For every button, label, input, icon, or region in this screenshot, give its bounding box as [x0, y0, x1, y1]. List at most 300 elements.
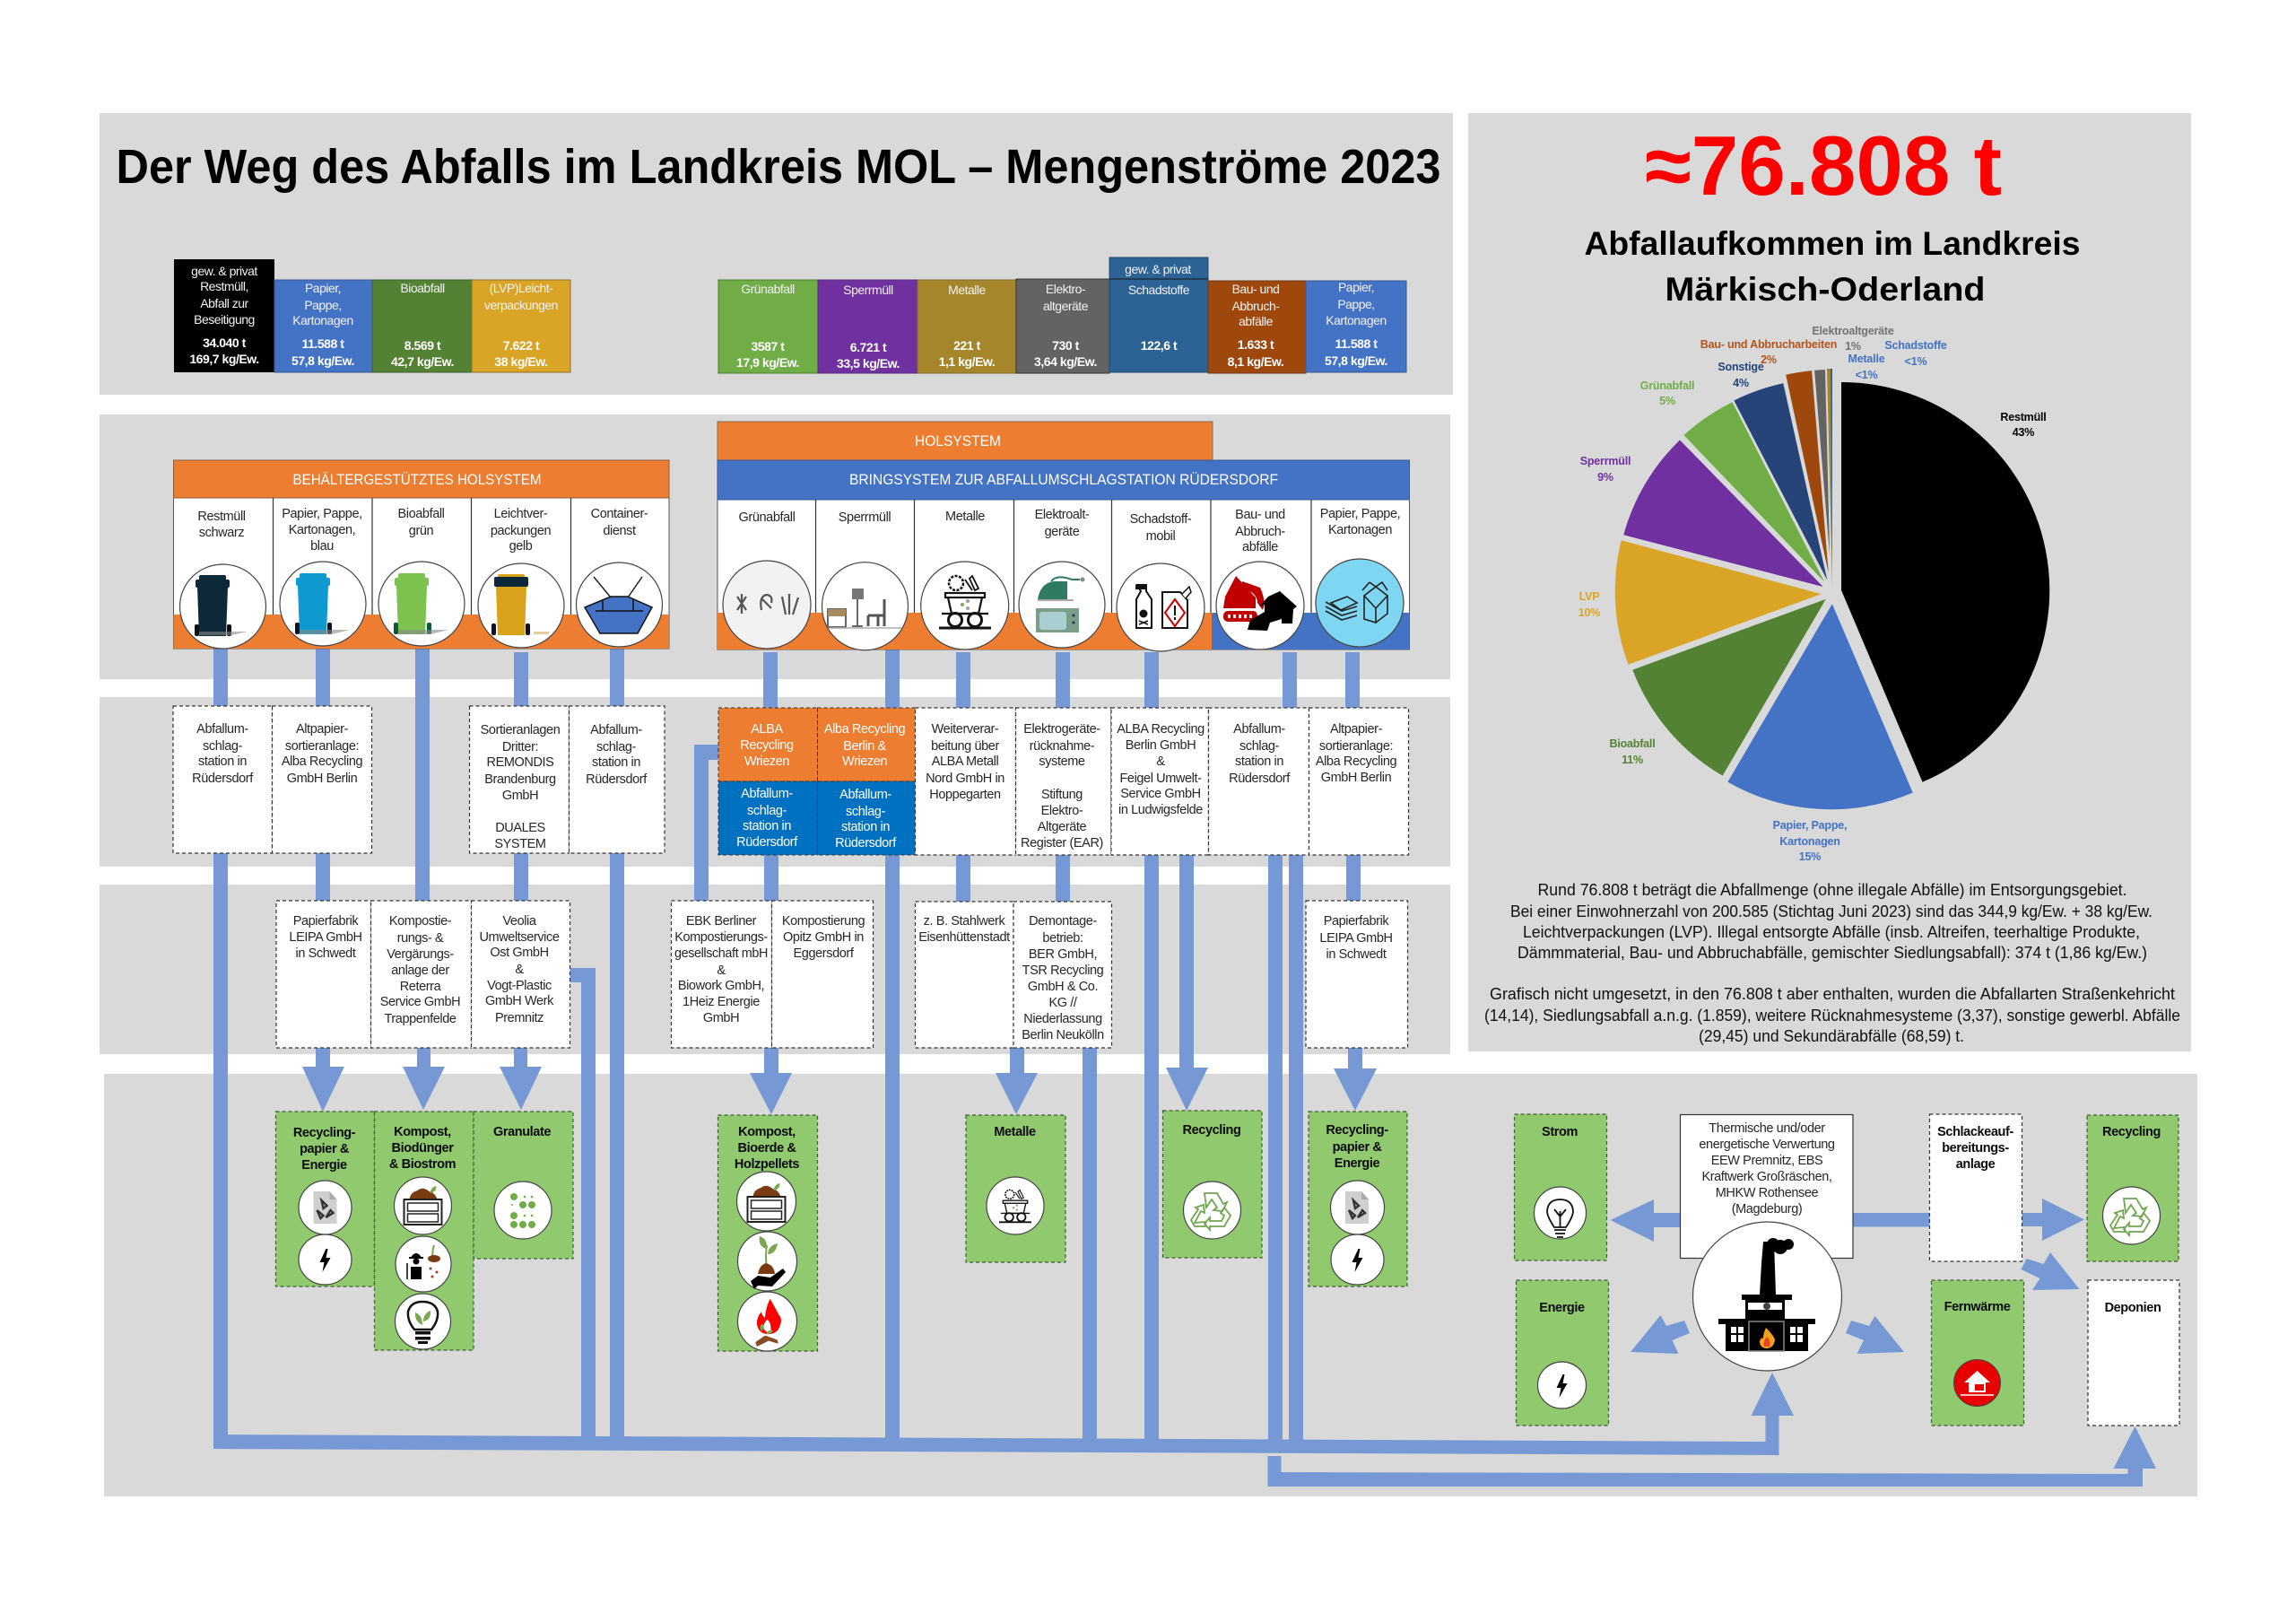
box: Alba Recycling Berlin und Wriezen: Alba Recycling [824, 722, 905, 737]
box: Weiterverarbeitung ALBA Metall: Nord GmbH in [926, 772, 1004, 786]
header: Bringsystem [718, 460, 1410, 500]
box: Sortieranlagen Dritter: Dritter: [502, 740, 538, 754]
processing row 2 [276, 901, 1408, 1048]
tile: Elektroaltgeräte: Elektro- [1046, 282, 1086, 296]
box: Reterra: Service GmbH [380, 995, 460, 1009]
product: Recyclingpapier und Energie: Recycling- [1326, 1123, 1388, 1138]
product: Kompost, Bioerde und Holzpellets: Bioerde & [738, 1141, 796, 1155]
tile: Bioabfall: 8.569 t [404, 338, 441, 353]
box: ALBA Recycling Wriezen: Abfallum- [741, 787, 793, 801]
tile: Papier Bringsystem: Papier, [1338, 280, 1374, 294]
icon: green bin [378, 562, 465, 646]
box: Weiterverarbeitung ALBA Metall: Hoppegarten [929, 788, 1001, 802]
product: Fernwärme [1932, 1280, 2023, 1426]
product: Recycling: Recycling [1183, 1123, 1240, 1138]
box: Weiterverarbeitung ALBA Metall: ALBA Metall [932, 754, 998, 769]
pie chart [1614, 369, 2050, 810]
chart heading: Abfallaufkommen im Landkreis [1584, 225, 2081, 262]
box: ALBA und Feigel: & [1156, 754, 1165, 769]
box: Altpapiersortieranlage: Altpapier- [296, 722, 349, 737]
pie labels: 15% [1799, 850, 1821, 863]
box: Stahlwerk [915, 902, 1013, 1048]
column labels: mobil [1146, 529, 1176, 544]
box: Abfallumschlagstation: Abfallum- [1233, 722, 1285, 737]
column labels [739, 507, 1400, 554]
panel: end products [104, 1074, 2197, 1496]
box: Altpapiersortieranlage: Altpapier- [1330, 722, 1383, 737]
product: Recyclingpapier und Energie [1309, 1112, 1407, 1286]
tile: Restmüll: Beseitigung [194, 312, 255, 327]
product: Recyclingpapier und Energie: Recycling- [293, 1126, 356, 1140]
tile: Papier: Pappe, [304, 298, 342, 312]
product: Metalle: Metalle [994, 1125, 1036, 1139]
tile: Papier: 57,8 kg/Ew. [291, 353, 354, 368]
box: Thermische Verwertung: MHKW Rothensee [1716, 1186, 1819, 1200]
box: Kompostierung Opitz: Eggersdorf [794, 946, 855, 961]
product: Recyclingpapier und Energie: papier & [1333, 1140, 1382, 1155]
box: Demontagebetrieb [1013, 902, 1112, 1048]
box: Elektrogeräterücknahme: Elektro- [1041, 804, 1083, 818]
column labels: geräte [1045, 525, 1080, 539]
box: Kompostierung Opitz [771, 901, 874, 1048]
box: EBK Berliner Kompostierung: Kompostierungs- [674, 930, 768, 945]
pie labels: Grünabfall [1640, 379, 1694, 392]
product: Granulate [474, 1112, 573, 1259]
tile: Elektroaltgeräte [1016, 279, 1109, 373]
pie labels: Bioabfall [1610, 737, 1655, 750]
icon: hazardous substances [1117, 563, 1205, 651]
box: Schlackeaufbereitungsanlage: Schlackeauf- [1937, 1125, 2013, 1139]
box: Veolia und Vogt-Plastic: GmbH Werk [485, 994, 554, 1008]
product: Kompost, Bioerde und Holzpellets [718, 1115, 818, 1351]
tile: Restmüll: 169,7 kg/Ew. [189, 352, 259, 366]
pie labels: Bau- und Abbrucharbeiten [1700, 338, 1837, 351]
box: Thermische Verwertung: Kraftwerk Großräschen, [1701, 1170, 1832, 1184]
box: ALBA und Feigel: ALBA Recycling [1117, 722, 1205, 737]
column labels: grün [409, 524, 434, 538]
column labels: Grünabfall [739, 510, 796, 525]
panel: title and quantities [100, 113, 1453, 395]
pie labels: 5% [1659, 395, 1675, 407]
box: ALBA und Feigel: Feigel Umwelt- [1119, 772, 1202, 786]
box: Reterra: rungs- & [397, 931, 444, 946]
explanatory text: Dämmmaterial, Bau- und Abbruchabfälle, gemischter Siedlungsabfall): 374 t (1,86 kg/Ew.) [1518, 944, 2147, 962]
tile: Schadstoffe: Schadstoffe [1128, 283, 1190, 297]
explanatory text: (29,45) und Sekundärabfälle (68,59) t. [1699, 1027, 1964, 1045]
pie labels: 4% [1733, 377, 1749, 389]
tile: Schadstoffe: 122,6 t [1141, 338, 1178, 353]
box: Thermische Verwertung: energetische Verwertung [1699, 1138, 1835, 1152]
main flow line to thermal recovery [213, 1373, 1794, 1455]
icon: excavator and rubble [1216, 562, 1304, 650]
box: Abfallumschlagstation: schlag- [1239, 739, 1280, 754]
tile: Sperrmüll [818, 280, 918, 373]
explanatory text: Grafisch nicht umgesetzt, in den 76.808 t aber enthalten, wurden die Abfallarten Straßenkehricht [1490, 985, 2175, 1003]
tile: Elektroaltgeräte: 3,64 kg/Ew. [1034, 354, 1097, 369]
box: Demontagebetrieb: BER GmbH, [1029, 947, 1097, 962]
box: ALBA Recycling Wriezen [718, 708, 818, 855]
box: Deponien [2088, 1280, 2179, 1426]
box: Abfallumschlagstation: Rüdersdorf [1229, 772, 1291, 786]
box: Kompostierung Opitz: Opitz GmbH in [783, 930, 864, 945]
chart heading: Märkisch-Oderland [1665, 271, 1986, 308]
product: Kompost, Biodünger und Biostrom: & Biostrom [389, 1157, 456, 1172]
box: Demontagebetrieb: Niederlassung [1023, 1012, 1102, 1026]
product: Fernwärme: Fernwärme [1944, 1300, 2011, 1314]
tile: Schadstoffe: gew. & privat [1125, 262, 1191, 276]
pie labels: 10% [1578, 606, 1600, 619]
box: Weiterverarbeitung ALBA Metall: beitung über [931, 739, 999, 754]
box: Veolia und Vogt-Plastic: Vogt-Plastic [487, 979, 552, 993]
column labels: Papier, Pappe, [282, 507, 362, 521]
box: Elektrogeräterücknahme: Stiftung [1041, 788, 1083, 802]
box: Papierfabrik LEIPA: Papierfabrik [1324, 914, 1389, 929]
box: Elektrogeräterücknahme: Elektrogeräte- [1023, 722, 1100, 737]
box: Sortieranlagen Dritter: GmbH [502, 789, 538, 803]
box: Veolia und Vogt-Plastic: & [515, 963, 524, 977]
product: Granulate: Granulate [493, 1125, 551, 1139]
product: Kompost, Bioerde und Holzpellets: Kompost, [738, 1125, 796, 1139]
box: EBK Berliner Kompostierung: gesellschaft mbH [674, 946, 768, 961]
box: Elektrogeräterücknahme: Altgeräte [1038, 820, 1087, 834]
box: Altpapiersortieranlage: Alba Recycling [282, 754, 362, 769]
box: Demontagebetrieb: GmbH & Co. [1028, 980, 1098, 994]
box: Abfallumschlagstation: Rüdersdorf [192, 772, 254, 786]
tile: Restmüll: gew. & privat [191, 264, 257, 278]
box: Abfallumschlagstation: schlag- [203, 739, 243, 754]
product: Recyclingpapier und Energie: Energie [301, 1158, 347, 1173]
box: Sortieranlagen Dritter: SYSTEM [494, 837, 546, 851]
box: Demontagebetrieb: betrieb: [1042, 931, 1083, 946]
pie labels: Papier, Pappe, [1773, 819, 1847, 832]
explanatory text: Rund 76.808 t beträgt die Abfallmenge (ohne illegale Abfälle) im Entsorgungsgebiet. [1537, 881, 2127, 899]
tile: Bioabfall: Bioabfall [400, 281, 445, 295]
box: Abfallumschlagstation: Abfallum- [196, 722, 248, 737]
tile: Papier Bringsystem: 11.588 t [1335, 336, 1378, 351]
column labels: Metalle [945, 510, 985, 524]
box: ALBA und Feigel: Berlin GmbH [1126, 738, 1196, 753]
column labels: schwarz [199, 526, 244, 540]
tile: Bau- und Abbruchabfälle: Bau- und [1232, 282, 1279, 296]
box: Papierfabrik LEIPA: Papierfabrik [293, 914, 359, 929]
tile: Grünabfall: Grünabfall [741, 282, 795, 296]
column labels: Kartonagen, [289, 523, 355, 537]
tile: LVP: verpackungen [484, 298, 558, 312]
box: Reterra: Vergärungs- [387, 947, 454, 962]
box: ALBA und Feigel [1111, 708, 1209, 855]
icon: iron and microwave [1019, 562, 1105, 648]
box: Thermische Verwertung: (Magdeburg) [1732, 1202, 1802, 1216]
icon: yellow bin [478, 563, 564, 648]
box: Alba Recycling Berlin und Wriezen: Berlin & [843, 739, 887, 754]
header: Holsystem [718, 422, 1213, 460]
header: Holsystem: HOLSYSTEM [915, 432, 1001, 449]
box: ALBA und Feigel: in Ludwigsfelde [1118, 803, 1203, 817]
icon: paper and boxes [1316, 559, 1404, 647]
column labels: Papier, Pappe, [1320, 507, 1400, 521]
box: Papierfabrik LEIPA: in Schwedt [1326, 947, 1387, 962]
box: Papierfabrik LEIPA: in Schwedt [296, 946, 356, 961]
tile: Sperrmüll: 6.721 t [850, 340, 887, 354]
box: Reterra [371, 901, 472, 1048]
box: Stahlwerk: Eisenhüttenstadt [918, 930, 1010, 945]
pie labels: <1% [1856, 369, 1877, 381]
icon: green waste [723, 561, 811, 649]
output arrows of thermal plant [1611, 1199, 2084, 1354]
box: Papierfabrik LEIPA: LEIPA GmbH [289, 930, 362, 945]
product: Recyclingpapier und Energie: Energie [1335, 1156, 1380, 1171]
panel: second processing stage [100, 885, 1450, 1054]
pie labels: Schadstoffe [1884, 339, 1947, 352]
box: Reterra: Reterra [400, 980, 442, 994]
box: Altpapiersortieranlage [273, 706, 371, 853]
box: EBK Berliner Kompostierung: & [717, 964, 726, 978]
explanatory text: Leichtverpackungen (LVP). Illegal entsorgte Abfälle (insb. Altreifen, teerhaltige Produkte, [1523, 923, 2140, 941]
product: Metalle [966, 1115, 1065, 1262]
box: EBK Berliner Kompostierung: GmbH [703, 1011, 739, 1025]
column labels: Bioabfall [397, 507, 445, 521]
box: Reterra: anlage der [391, 964, 449, 978]
box: Sortieranlagen Dritter: REMONDIS [487, 755, 553, 770]
arrows into end products [302, 852, 1377, 1114]
chart heading [1584, 225, 2081, 308]
product: Kompost, Bioerde und Holzpellets: Holzpellets [735, 1157, 799, 1172]
pie labels: Kartonagen [1779, 835, 1840, 848]
tile: Metalle: Metalle [948, 283, 987, 297]
tile: Grünabfall [718, 280, 818, 373]
box: ALBA Recycling Wriezen: ALBA [751, 722, 783, 737]
box: Sortieranlagen Dritter: Sortieranlagen [481, 723, 561, 737]
title: Der Weg des Abfalls im Landkreis MOL – Mengenströme 2023 [117, 140, 1440, 194]
pie labels: <1% [1905, 355, 1926, 368]
tile: Papier Bringsystem: Kartonagen [1326, 313, 1387, 327]
tile: Grünabfall: 17,9 kg/Ew. [736, 355, 799, 370]
tile: Bau- und Abbruchabfälle: 1.633 t [1238, 337, 1274, 352]
box: Alba Recycling Berlin und Wriezen: schlag- [846, 805, 886, 819]
box: Altpapiersortieranlage: GmbH Berlin [1321, 771, 1392, 785]
box: Altpapiersortieranlage: sortieranlage: [285, 739, 359, 754]
product: Energie: Energie [1539, 1301, 1585, 1315]
box: Papierfabrik LEIPA [276, 901, 371, 1048]
pie labels: 11% [1622, 754, 1643, 766]
box: Veolia und Vogt-Plastic: Premnitz [495, 1011, 544, 1025]
tile: Schadstoffe [1109, 257, 1208, 372]
tile: LVP: 38 kg/Ew. [494, 354, 548, 369]
box: Altpapiersortieranlage [1309, 708, 1408, 855]
pie labels: 1% [1845, 340, 1861, 353]
box: Demontagebetrieb: Berlin Neukölln [1022, 1028, 1104, 1042]
box: Demontagebetrieb: TSR Recycling [1022, 964, 1104, 978]
column labels: Restmüll [197, 510, 246, 524]
product: Kompost, Biodünger und Biostrom [375, 1112, 474, 1350]
tile: Restmüll: Restmüll, [200, 279, 248, 293]
tile: Sperrmüll: Sperrmüll [843, 283, 893, 297]
box: Veolia und Vogt-Plastic: Ost GmbH [490, 946, 549, 960]
box: Thermische Verwertung [1681, 1114, 1853, 1258]
panel: first processing stage [100, 697, 1450, 867]
box: Sortieranlagen Dritter: DUALES [495, 821, 545, 835]
box: ALBA und Feigel: Service GmbH [1120, 787, 1201, 801]
box: Alba Recycling Berlin und Wriezen: station in [841, 820, 890, 834]
box: EBK Berliner Kompostierung [671, 901, 771, 1048]
panel: overall total and pie chart [1468, 113, 2191, 1051]
column labels: Sperrmüll [839, 510, 891, 525]
tile: Bau- und Abbruchabfälle: Abbruch- [1232, 299, 1280, 313]
pie labels: Restmüll [2000, 411, 2047, 423]
column labels: abfälle [1242, 540, 1278, 554]
tile: Metalle: 1,1 kg/Ew. [939, 354, 995, 369]
tile: Bau- und Abbruchabfälle [1208, 281, 1306, 373]
processing row 1: Behältersystem [173, 706, 665, 853]
column labels [197, 507, 648, 554]
box: Elektrogeräterücknahme: systeme [1039, 754, 1085, 769]
header: Behältergestütztes Holsystem [174, 460, 669, 498]
box: Weiterverarbeitung ALBA Metall: Weiterverar- [932, 722, 999, 737]
box: Schlackeaufbereitungsanlage: bereitungs- [1942, 1141, 2009, 1155]
pie labels: Sonstige [1718, 361, 1764, 373]
tile: LVP: 7.622 t [503, 338, 540, 353]
pie labels: Metalle [1848, 353, 1885, 365]
box: Altpapiersortieranlage: sortieranlage: [1319, 739, 1393, 754]
quantity tiles: right group [718, 257, 1406, 373]
box: Alba Recycling Berlin und Wriezen: Wriezen [842, 754, 887, 769]
processing row 1: Bringsystem [718, 708, 1408, 855]
column labels: Bau- und [1235, 508, 1285, 522]
icon: skip container [576, 562, 662, 647]
product: Energie [1516, 1280, 1609, 1426]
box: Schlackeaufbereitungsanlage [1930, 1114, 2022, 1261]
box: ALBA Recycling Wriezen: schlag- [747, 804, 787, 818]
box: Reterra: Trappenfelde [384, 1012, 457, 1026]
tile: Bioabfall [372, 280, 472, 372]
box: Abfallumschlagstation: station in [198, 754, 247, 769]
box: ALBA Recycling Wriezen: Rüdersdorf [736, 835, 798, 850]
explanatory text: (14,14), Siedlungsabfall a.n.g. (1.859), weitere Rücknahmesysteme (3,37), sonstige gewerbl. Abfälle [1484, 1007, 2180, 1025]
tile: Papier Bringsystem: Pappe, [1337, 297, 1375, 311]
tile: Papier: 11.588 t [301, 336, 344, 351]
box: Abfallumschlagstation: Rüdersdorf [586, 772, 648, 787]
box: Abfallumschlagstation [173, 706, 273, 853]
box: EBK Berliner Kompostierung: 1Heiz Energie [683, 995, 760, 1009]
tile: Papier [274, 280, 372, 372]
box: Stahlwerk: z. B. Stahlwerk [924, 914, 1005, 929]
tile: Bioabfall: 42,7 kg/Ew. [391, 354, 454, 369]
box: Alba Recycling Berlin und Wriezen [818, 708, 915, 855]
pie labels: Elektroaltgeräte [1812, 325, 1894, 337]
flow connectors [213, 646, 1361, 1449]
box: ALBA Recycling Wriezen: station in [743, 819, 791, 833]
tile: Restmüll: Abfall zur [200, 296, 249, 310]
column labels: gelb [509, 539, 533, 554]
icon: blue bin [280, 562, 366, 646]
tile: Grünabfall: 3587 t [752, 339, 785, 353]
header: Bringsystem: BRINGSYSTEM ZUR ABFALLUMSCHLAGSTATION RÜDERSDORF [849, 471, 1278, 488]
product: Kompost, Biodünger und Biostrom: Kompost, [394, 1125, 451, 1139]
box: Elektrogeräterücknahme: Register (EAR) [1021, 836, 1103, 850]
header: Behältergestütztes Holsystem: BEHÄLTERGESTÜTZTES HOLSYSTEM [292, 471, 542, 488]
pie labels: 2% [1761, 353, 1777, 366]
tile: LVP [472, 280, 570, 372]
tile: Papier Bringsystem: 57,8 kg/Ew. [1325, 353, 1387, 368]
tile: Metalle: 221 t [953, 338, 981, 353]
tile: LVP: (LVP)Leicht- [490, 281, 553, 295]
box: Abfallumschlagstation: schlag- [596, 740, 637, 754]
tile: Elektroaltgeräte: altgeräte [1043, 299, 1089, 313]
box: Demontagebetrieb: Demontage- [1029, 914, 1097, 929]
box: Abfallumschlagstation [1209, 708, 1309, 855]
box: Abfallumschlagstation: Abfallum- [590, 723, 642, 737]
box: Schlackeaufbereitungsanlage: anlage [1956, 1157, 1996, 1172]
panel: Bringsystem [718, 460, 1410, 651]
icon: bulky waste furniture [822, 562, 908, 650]
tile: Metalle [918, 280, 1016, 373]
column labels: Abbruch- [1235, 525, 1285, 539]
pie labels: 43% [2013, 426, 2034, 439]
box: Veolia und Vogt-Plastic: Veolia [502, 914, 537, 929]
box: Alba Recycling Berlin und Wriezen: Rüdersdorf [835, 836, 897, 850]
box: Alba Recycling Berlin und Wriezen: Abfallum- [839, 788, 891, 802]
tile: Papier: Papier, [305, 281, 341, 295]
box: Deponien: Deponien [2105, 1301, 2161, 1315]
box: Abfallumschlagstation: station in [592, 755, 640, 770]
column labels: Elektroalt- [1035, 508, 1090, 522]
box: Papierfabrik LEIPA [1306, 901, 1408, 1048]
column labels: packungen [491, 524, 552, 538]
box: Altpapiersortieranlage: GmbH Berlin [287, 772, 358, 786]
box: ALBA Recycling Wriezen: Wriezen [744, 754, 789, 769]
product: Strom [1514, 1114, 1607, 1260]
box: Thermische Verwertung: Thermische und/oder [1709, 1121, 1825, 1136]
tile: Restmüll [174, 259, 274, 372]
icon: incineration plant [1693, 1222, 1842, 1371]
product: Kompost, Biodünger und Biostrom: Biodünger [392, 1141, 454, 1155]
box: Demontagebetrieb: KG // [1048, 996, 1078, 1010]
tile: Bau- und Abbruchabfälle: abfälle [1239, 314, 1274, 328]
box: Kompostierung Opitz: Kompostierung [782, 914, 865, 929]
box: Elektrogeräterücknahme: rücknahme- [1030, 739, 1095, 754]
box: Thermische Verwertung: EEW Premnitz, EBS [1711, 1154, 1822, 1168]
product: Recyclingpapier und Energie [276, 1112, 375, 1286]
column labels: Schadstoff- [1130, 512, 1192, 527]
column labels: blau [310, 539, 334, 554]
column labels: dienst [603, 524, 636, 538]
pie labels: 9% [1597, 471, 1613, 484]
box: Weiterverarbeitung ALBA Metall [915, 708, 1015, 855]
box: Sortieranlagen Dritter: Brandenburg [484, 772, 556, 787]
flow line to landfill [1268, 1426, 2156, 1487]
explanatory text [1484, 881, 2180, 1045]
explanatory text: Bei einer Einwohnerzahl von 200.585 (Stichtag Juni 2023) sind das 344,9 kg/Ew. + 38 kg/Ew. [1510, 903, 2152, 920]
tile: Elektroaltgeräte: 730 t [1052, 338, 1080, 353]
product: Recycling [2087, 1115, 2179, 1261]
box: EBK Berliner Kompostierung: EBK Berliner [686, 914, 757, 929]
product: Strom: Strom [1542, 1125, 1578, 1139]
product: Recycling: Recycling [2102, 1125, 2161, 1139]
tile: Bau- und Abbruchabfälle: 8,1 kg/Ew. [1228, 354, 1283, 369]
box: EBK Berliner Kompostierung: Biowork GmbH, [678, 979, 764, 993]
box: Altpapiersortieranlage: Alba Recycling [1316, 754, 1396, 769]
panel: collection systems [100, 414, 1450, 679]
box: Reterra: Kompostie- [389, 914, 452, 929]
total amount: ≈76.808 t [1645, 118, 2002, 213]
box: ALBA Recycling Wriezen: Recycling [740, 738, 794, 753]
tile: Papier Bringsystem [1306, 280, 1406, 372]
box: Abfallumschlagstation [569, 706, 665, 853]
column labels: Kartonagen [1328, 523, 1392, 537]
icon: metal cart [921, 562, 1009, 650]
product: Recycling [1162, 1111, 1262, 1258]
icon: black bin [179, 564, 265, 649]
